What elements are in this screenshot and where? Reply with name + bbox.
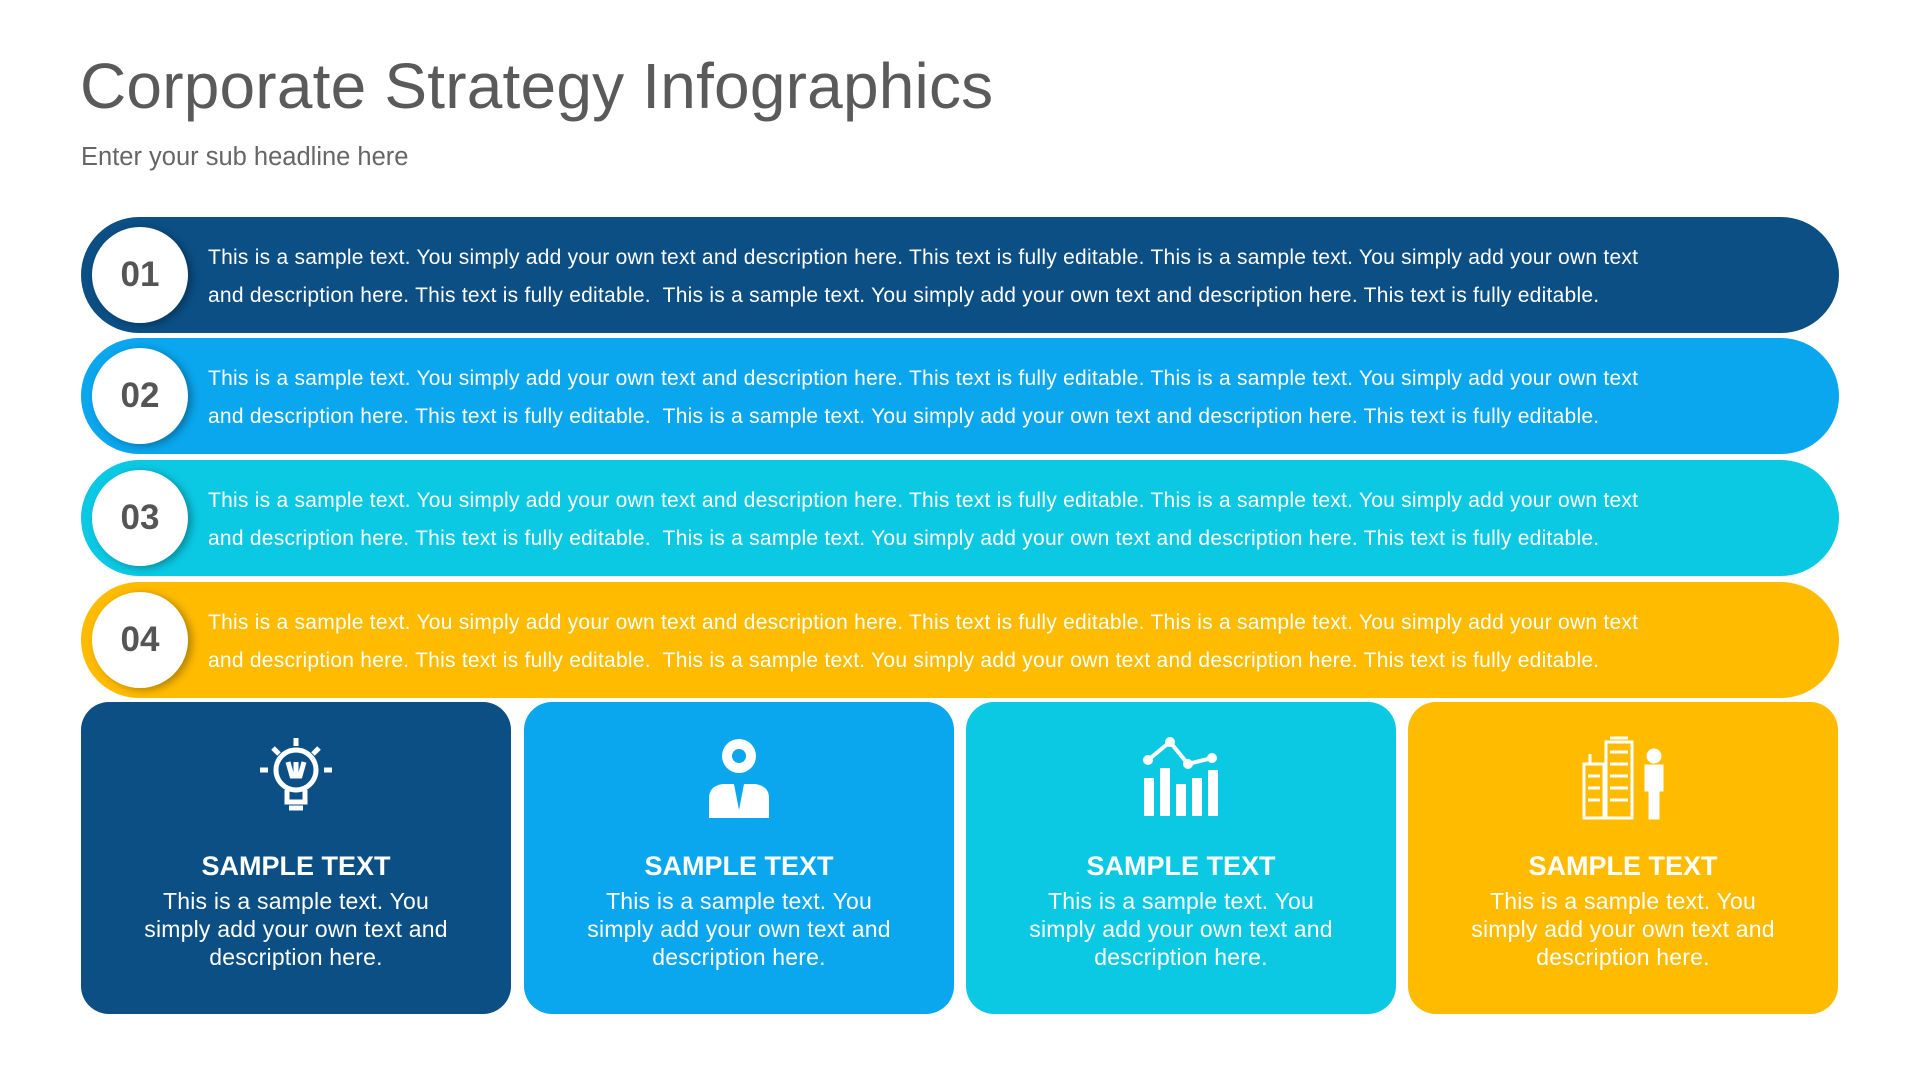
card 4 (1408, 702, 1838, 1014)
card 3: description here. (1094, 944, 1268, 970)
card 4: simply add your own text and (1471, 916, 1775, 942)
row 03 (81, 460, 1839, 576)
card 2: description here. (652, 944, 826, 970)
row 03: and description here. This text is fully editable. This is a sample text. You simply add your own text and description here. This text is fully editable. (208, 527, 1599, 550)
card 2: SAMPLE TEXT (644, 851, 834, 881)
card 3: SAMPLE TEXT (1086, 851, 1276, 881)
card 1: description here. (209, 944, 383, 970)
card 1 (81, 702, 511, 1014)
card 1: SAMPLE TEXT (201, 851, 390, 881)
row 02: This is a sample text. You simply add your own text and description here. This text is fully editable. This is a sample text. You simply add your own text (208, 367, 1638, 390)
card 1: This is a sample text. You (163, 888, 429, 914)
row 01: This is a sample text. You simply add your own text and description here. This text is fully editable. This is a sample text. You simply add your own text (208, 246, 1638, 269)
subtitle: Enter your sub headline here (81, 143, 408, 171)
title: Corporate Strategy Infographics (80, 50, 993, 122)
icon: gear person (709, 739, 769, 818)
card 3: simply add your own text and (1029, 916, 1333, 942)
row 01 (81, 217, 1839, 333)
card 3: This is a sample text. You (1048, 888, 1314, 914)
card 4: This is a sample text. You (1490, 888, 1756, 914)
card 4: SAMPLE TEXT (1528, 851, 1718, 881)
row 02: 02 (121, 376, 159, 415)
row 04: This is a sample text. You simply add your own text and description here. This text is fully editable. This is a sample text. You simply add your own text (208, 611, 1638, 634)
card 2: This is a sample text. You (606, 888, 872, 914)
row 02: and description here. This text is fully editable. This is a sample text. You simply add your own text and description here. This text is fully editable. (208, 405, 1599, 428)
row 02 (81, 338, 1839, 454)
icon: buildings and person (1582, 736, 1664, 820)
icon: bar chart (1143, 737, 1218, 816)
icon: light bulb (260, 738, 332, 810)
card 1: simply add your own text and (144, 916, 448, 942)
row 04: 04 (121, 620, 159, 659)
card 2 (524, 702, 954, 1014)
card 4: description here. (1536, 944, 1710, 970)
row 03: 03 (121, 498, 159, 537)
row 04 (81, 582, 1839, 698)
card 2: simply add your own text and (587, 916, 891, 942)
row 01: and description here. This text is fully editable. This is a sample text. You simply add your own text and description here. This text is fully editable. (208, 284, 1599, 307)
row 01: 01 (121, 255, 159, 294)
row 04: and description here. This text is fully editable. This is a sample text. You simply add your own text and description here. This text is fully editable. (208, 649, 1599, 672)
card 3 (966, 702, 1396, 1014)
row 03: This is a sample text. You simply add your own text and description here. This text is fully editable. This is a sample text. You simply add your own text (208, 489, 1638, 512)
